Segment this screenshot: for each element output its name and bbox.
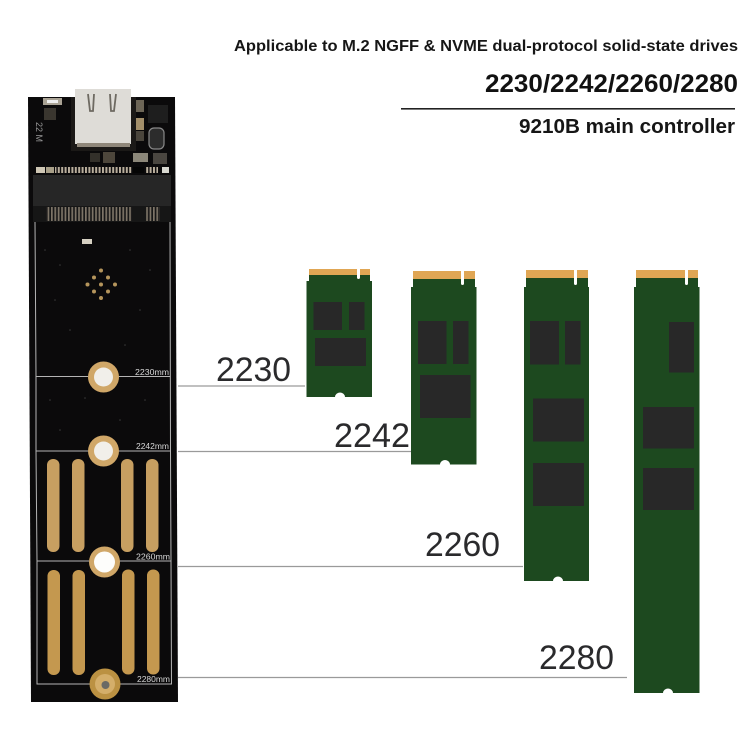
label 2242: 2242 [334, 417, 410, 455]
heading: controller: 9210B main controller [519, 116, 735, 138]
size labels on board: 2230mm [135, 368, 169, 377]
label 2230: 2230 [216, 351, 291, 389]
SSD 2242 [411, 270, 476, 464]
heading: sizes: 2230/2242/2260/2280 [485, 70, 738, 98]
heading: applicable drives: Applicable to M.2 NGFF & NVME dual-protocol solid-state drives [234, 38, 738, 55]
board body [28, 97, 178, 702]
size labels on board: 2260mm [136, 552, 170, 562]
white marking [82, 239, 92, 244]
mounting hole 2242 [88, 436, 119, 466]
gold bars upper [47, 459, 158, 552]
divider rule [401, 108, 735, 110]
size labels on board [135, 368, 170, 684]
mounting hole 2260 [89, 546, 120, 578]
SSD 2230 [306, 268, 372, 397]
enclosure circuit board [28, 89, 178, 702]
board outline markings [35, 222, 172, 684]
USB-C connector [71, 89, 136, 151]
label 2260: 2260 [425, 526, 500, 564]
SSD 2280 [634, 269, 700, 693]
size labels on board: 2242mm [136, 442, 169, 451]
M.2 connector [33, 167, 171, 222]
PCB components [34, 98, 168, 164]
mounting hole 2230 [88, 362, 119, 392]
size labels on board: 2280mm [137, 675, 170, 684]
contact pads cluster [86, 268, 117, 300]
mounting screw 2280 [90, 668, 120, 700]
leader lines [178, 386, 627, 678]
label 2280: 2280 [539, 639, 614, 677]
gold bars lower [48, 570, 160, 675]
SSD 2260 [524, 269, 589, 581]
PCB components: 22 M [34, 122, 44, 142]
board speckles [44, 249, 151, 431]
